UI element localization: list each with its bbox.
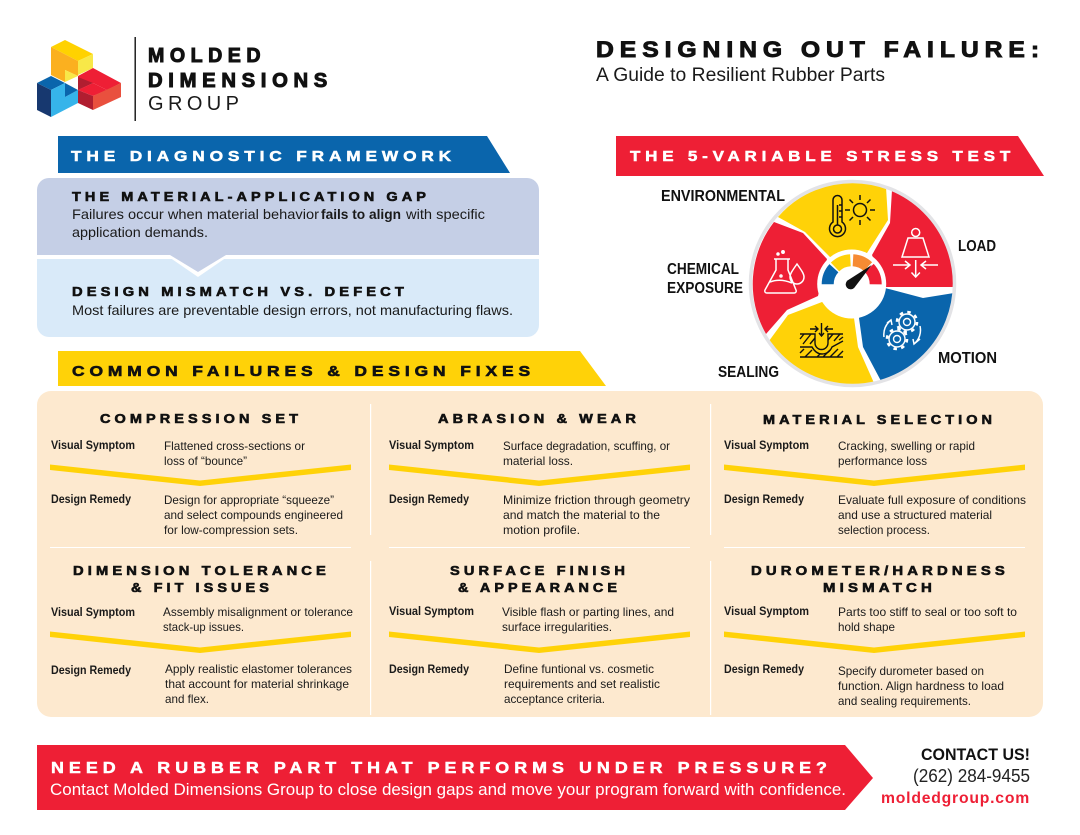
card: surface finish and appearance: Design Remedy <box>389 662 469 676</box>
card: compression set: loss of “bounce” <box>164 454 247 468</box>
card: compression set: COMPRESSION SET <box>100 411 302 426</box>
card: material selection: selection process. <box>838 523 930 537</box>
banner: the diagnostic framework <box>58 136 510 173</box>
panel: material-application gap <box>37 178 539 255</box>
card: dimension tolerance and fit issues: stack-up issues. <box>163 620 244 634</box>
card: compression set: Design for appropriate “squeeze” <box>164 493 334 507</box>
panel: design mismatch vs defect <box>37 255 539 337</box>
card: compression set: and select compounds engineered <box>164 508 343 522</box>
panel: design mismatch vs defect: Most failures are preventable design errors, not manufacturing flaws. <box>72 302 513 318</box>
card: material selection: Evaluate full exposure of conditions <box>838 493 1026 507</box>
wheel labels: MOTION <box>938 350 997 367</box>
card: abrasion and wear: Minimize friction through geometry <box>503 493 690 507</box>
card: dimension tolerance and fit issues: Apply realistic elastomer tolerances <box>165 662 352 676</box>
banner: common failures and design fixes: COMMON FAILURES & DESIGN FIXES <box>72 363 535 380</box>
wheel labels: EXPOSURE <box>667 280 743 297</box>
card: material selection: and use a structured material <box>838 508 992 522</box>
logo: Molded Dimensions Group: DIMENSIONS <box>148 70 333 92</box>
segment: chemical exposure <box>753 222 827 334</box>
card: durometer hardness mismatch: Specify durometer based on <box>838 664 984 678</box>
call to action banner: NEED A RUBBER PART THAT PERFORMS UNDER PRESSURE? <box>51 760 832 777</box>
card: durometer hardness mismatch: and sealing requirements. <box>838 694 971 708</box>
card: material selection <box>724 412 1026 537</box>
icon: thermometer and sun <box>829 195 875 237</box>
contact details: CONTACT US! <box>921 745 1030 764</box>
contact details <box>881 745 1030 807</box>
card: dimension tolerance and fit issues: and flex. <box>165 692 209 706</box>
logo: Molded Dimensions Group: GROUP <box>148 93 239 115</box>
card: durometer hardness mismatch: Design Remedy <box>724 662 804 676</box>
icon: weight <box>893 228 938 277</box>
title <box>596 37 1045 86</box>
banner: the 5-variable stress test <box>616 136 1044 176</box>
wheel labels <box>661 188 997 381</box>
card: material selection: MATERIAL SELECTION <box>763 412 996 427</box>
card: surface finish and appearance: Visual Symptom <box>389 604 474 618</box>
logo: Molded Dimensions Group: MOLDED <box>148 45 266 67</box>
card: abrasion and wear: material loss. <box>503 454 573 468</box>
card: dimension tolerance and fit issues: DIMENSION TOLERANCE <box>73 563 330 578</box>
card: abrasion and wear <box>389 411 690 537</box>
banner: the diagnostic framework: THE DIAGNOSTIC FRAMEWORK <box>71 148 456 165</box>
card: dimension tolerance and fit issues: Assembly misalignment or tolerance <box>163 605 353 619</box>
card: compression set: Flattened cross-sections or <box>164 439 305 453</box>
segment: load <box>872 190 954 287</box>
card: material selection: Visual Symptom <box>724 438 809 452</box>
gauge <box>817 250 886 318</box>
card: dimension tolerance and fit issues: Visual Symptom <box>51 605 135 619</box>
logo: Molded Dimensions Group <box>37 37 333 121</box>
card: surface finish and appearance <box>389 563 690 706</box>
card: abrasion and wear: motion profile. <box>503 523 580 537</box>
card: abrasion and wear: and match the material to the <box>503 508 660 522</box>
gauge needle <box>846 265 872 289</box>
icon: gears <box>884 312 920 349</box>
card: durometer hardness mismatch: Visual Symptom <box>724 604 809 618</box>
card: durometer hardness mismatch: DUROMETER/HARDNESS <box>751 563 1009 578</box>
card: surface finish and appearance: Visible flash or parting lines, and <box>502 605 674 619</box>
card: material selection: Cracking, swelling or rapid <box>838 439 975 453</box>
card: compression set: Visual Symptom <box>51 438 135 452</box>
panel: material-application gap: application demands. <box>72 224 208 240</box>
card: abrasion and wear: Design Remedy <box>389 492 469 506</box>
card: surface finish and appearance: acceptance criteria. <box>504 692 605 706</box>
card: dimension tolerance and fit issues: Design Remedy <box>51 663 131 677</box>
card: abrasion and wear: ABRASION & WEAR <box>438 411 640 426</box>
card: material selection: performance loss <box>838 454 927 468</box>
card: surface finish and appearance: Define funtional vs. cosmetic <box>504 662 654 676</box>
wheel labels: ENVIRONMENTAL <box>661 188 785 205</box>
panel: failures grid <box>37 391 1043 717</box>
panel: design mismatch vs defect: DESIGN MISMATCH VS. DEFECT <box>72 284 408 299</box>
card: surface finish and appearance: surface irregularities. <box>502 620 612 634</box>
panel: material-application gap: with specific <box>405 206 485 222</box>
call to action banner <box>37 745 873 810</box>
title: DESIGNING OUT FAILURE: <box>596 37 1045 62</box>
icon: seal cross-section <box>800 323 843 357</box>
card: compression set: Design Remedy <box>51 492 131 506</box>
card: durometer hardness mismatch: function. Align hardness to load <box>838 679 1004 693</box>
card: dimension tolerance and fit issues <box>50 563 353 706</box>
card: durometer hardness mismatch: MISMATCH <box>823 580 936 595</box>
card: surface finish and appearance: SURFACE FINISH <box>450 563 629 578</box>
wheel labels: CHEMICAL <box>667 261 739 278</box>
title: A Guide to Resilient Rubber Parts <box>596 65 885 86</box>
card: surface finish and appearance: & APPEARANCE <box>458 580 621 595</box>
banner: the 5-variable stress test: THE 5-VARIABLE STRESS TEST <box>630 148 1015 165</box>
logo mark: isometric cubes <box>37 40 121 117</box>
card: dimension tolerance and fit issues: & FIT ISSUES <box>131 580 273 595</box>
chart: 5-variable stress wheel <box>661 182 997 386</box>
panel: material-application gap: fails to align <box>321 206 401 222</box>
card: dimension tolerance and fit issues: that account for material shrinkage <box>165 677 349 691</box>
icon: flask and drop <box>765 251 804 293</box>
wheel labels: LOAD <box>958 238 996 255</box>
card: durometer hardness mismatch <box>724 563 1025 708</box>
wheel labels: SEALING <box>718 364 779 381</box>
card: compression set <box>50 411 351 537</box>
card: abrasion and wear: Visual Symptom <box>389 438 474 452</box>
segment: environmental <box>778 182 888 257</box>
card: compression set: for low-compression sets. <box>164 523 298 537</box>
card: durometer hardness mismatch: Parts too stiff to seal or too soft to <box>838 605 1017 619</box>
banner: common failures and design fixes <box>58 351 606 386</box>
contact details: moldedgroup.com <box>881 790 1030 807</box>
card: durometer hardness mismatch: hold shape <box>838 620 895 634</box>
call to action banner: Contact Molded Dimensions Group to close design gaps and move your program forward with confidence. <box>50 780 846 799</box>
card: material selection: Design Remedy <box>724 492 804 506</box>
card: abrasion and wear: Surface degradation, scuffing, or <box>503 439 670 453</box>
segment: motion <box>859 288 954 381</box>
panel: material-application gap: Failures occur when material behavior <box>72 206 319 222</box>
panel: diagnostic framework <box>37 178 539 337</box>
segment: sealing <box>769 302 874 385</box>
card: surface finish and appearance: requirements and set realistic <box>504 677 660 691</box>
panel: material-application gap: THE MATERIAL-APPLICATION GAP <box>72 189 430 204</box>
contact details: (262) 284-9455 <box>913 766 1030 786</box>
